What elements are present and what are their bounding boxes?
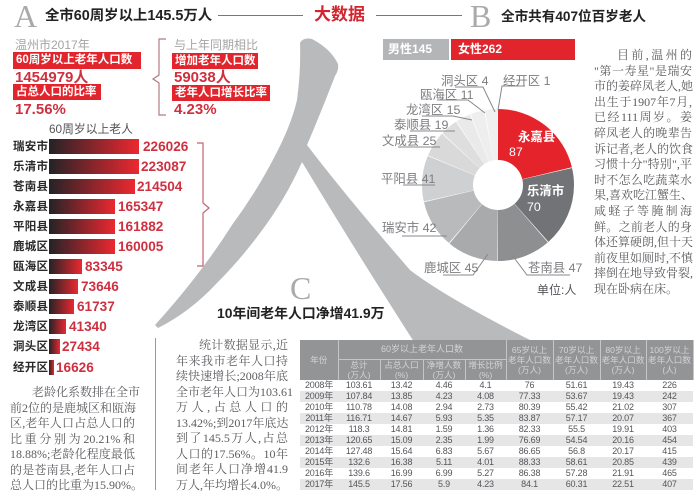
text block: oldest resident story: 摔倒在地导致骨裂, (594, 266, 693, 280)
text block: ageing coefficient: 比重分别为20.21%和 (10, 432, 135, 446)
data table: elderly population 2008-2017: (%) (395, 370, 408, 380)
data table: elderly population 2008-2017: (万人) (565, 365, 588, 375)
text block: ten-year growth: 间老年人口净增41.9 (176, 462, 288, 476)
data table: elderly population 2008-2017: 13.42 (391, 380, 412, 390)
donut chart: centenarians by district: 洞头区 4 (441, 74, 489, 88)
female segment (451, 39, 575, 60)
text block: ten-year growth (176, 338, 293, 492)
data table: elderly population 2008-2017: 1.59 (436, 424, 452, 434)
data table: elderly population 2008-2017: 80.39 (519, 402, 540, 412)
bar: 文成县: 73646 (81, 279, 119, 294)
data table: elderly population 2008-2017: (人) (662, 365, 677, 375)
data table: elderly population 2008-2017: 6.83 (436, 446, 452, 456)
data table: elderly population 2008-2017: 83.87 (519, 413, 540, 423)
bar: 龙湾区 (13, 319, 107, 334)
panel: gender split bar (383, 39, 575, 60)
value: population aged 60+: 1454979人 (15, 69, 88, 86)
bracket grouping top six districts (197, 142, 210, 267)
bar: 永嘉县 (13, 199, 163, 214)
donut chart: centenarians by district: 单位:人 (537, 282, 576, 297)
value: growth rate: 4.23% (174, 101, 217, 118)
data table: elderly population 2008-2017: 2008年 (305, 380, 333, 390)
text block: oldest resident story: 时不怎么吃蔬菜水 (594, 173, 692, 187)
data table: elderly population 2008-2017: 20.17 (612, 446, 634, 456)
data table: elderly population 2008-2017: (万人) (433, 370, 455, 380)
data table: elderly population 2008-2017: 1.99 (477, 435, 494, 445)
donut chart: centenarians by district: 70 (527, 200, 541, 214)
data table: elderly population 2008-2017: 5.9 (438, 479, 450, 489)
bar: 瑞安市: 226026 (143, 139, 188, 154)
data table: elderly population 2008-2017: 净增人数 (427, 360, 461, 370)
label: share of population: 占总人口的比率 (16, 86, 96, 98)
bar: 鹿城区: 160005 (118, 239, 163, 254)
data table: elderly population 2008-2017: 55.42 (566, 402, 587, 412)
data table: elderly population 2008-2017: (万人) (612, 365, 634, 375)
data table: elderly population 2008-2017: 老年人口数 (602, 355, 644, 365)
data table: elderly population 2008-2017: 2.94 (436, 402, 452, 412)
female segment: 女性262 (458, 42, 502, 56)
donut chart: centenarians by district: 87 (509, 145, 523, 159)
data table: elderly population 2008-2017: 4.23 (477, 479, 494, 489)
data table: elderly population 2008-2017: 14.81 (391, 424, 412, 434)
data table: elderly population 2008-2017: 5.11 (436, 457, 452, 467)
bar: 瓯海区 (13, 259, 123, 274)
data table: elderly population 2008-2017: 17.56 (391, 479, 412, 489)
data table: elderly population 2008-2017: 增长比例 (468, 360, 503, 370)
donut chart: centenarians by district: 永嘉县 (518, 129, 555, 144)
text block: oldest resident story: 习惯十分"特别",平 (594, 157, 692, 171)
data table: elderly population 2008-2017: 22.51 (612, 479, 634, 489)
section C heading: 10年间老年人口净增41.9万 (217, 305, 385, 321)
donut chart: centenarians by district: 经开区 1 (503, 74, 551, 88)
data table: elderly population 2008-2017: 139.6 (348, 468, 370, 478)
data table: elderly population 2008-2017: 82.33 (519, 424, 540, 434)
text block: oldest resident story: 体还算硬朗,但十天 (594, 235, 693, 249)
bar: 永嘉县: 165347 (118, 199, 163, 214)
text block: oldest resident story: 鲜。之前老人的身 (594, 220, 692, 234)
data table: elderly population 2008-2017: 118.3 (349, 424, 369, 434)
data table: elderly population 2008-2017: 2010年 (305, 402, 333, 412)
data table: elderly population 2008-2017: 439 (662, 457, 677, 467)
text block: ten-year growth: 13.42%;到2017年底达 (176, 416, 288, 430)
data table: elderly population 2008-2017: 226 (662, 380, 677, 390)
data table: elderly population 2008-2017: 5.35 (477, 413, 494, 423)
bar: 瓯海区: 83345 (85, 259, 123, 274)
bar: 乐清市 (13, 159, 186, 174)
text block: ten-year growth: 万人,年均增长4.0%。 (176, 478, 288, 492)
bar: 苍南县 (13, 179, 182, 194)
bar: 洞头区 (13, 339, 100, 354)
data table: elderly population 2008-2017: 21.02 (612, 402, 634, 412)
data table: elderly population 2008-2017: 76 (525, 380, 534, 390)
data table: elderly population 2008-2017 (300, 340, 694, 490)
bar: 泰顺县 (13, 299, 115, 314)
text block: oldest resident story (594, 48, 693, 296)
bar: 瑞安市: 瑞安市 (13, 141, 48, 153)
data table: elderly population 2008-2017: 132.6 (348, 457, 370, 467)
bar: 洞头区: 洞头区 (13, 341, 48, 353)
label: added elderly: 增加老年人口数 (175, 55, 256, 67)
bar: 文成县 (13, 279, 119, 294)
data table: elderly population 2008-2017: 454 (662, 435, 677, 445)
data table: elderly population 2008-2017: 2.73 (477, 402, 494, 412)
data table: elderly population 2008-2017: 14.08 (391, 402, 412, 412)
data table: elderly population 2008-2017: 总计 (350, 360, 368, 370)
data table: elderly population 2008-2017: 2016年 (305, 468, 333, 478)
panel: Wenzhou 2017 elderly stats (13, 38, 141, 118)
bar: 龙湾区: 41340 (69, 319, 107, 334)
data table: elderly population 2008-2017: 21.91 (612, 468, 634, 478)
text block: oldest resident story: 前夜里如厕时,不慎 (594, 251, 693, 265)
text block: ten-year growth: 年来我市老年人口持 (176, 354, 288, 368)
data table: elderly population 2008-2017: 86.38 (519, 468, 540, 478)
bar: 平阳县: 161882 (118, 219, 163, 234)
text block: ageing coefficient: 区,老年人口占总人口的 (10, 416, 135, 430)
data table: elderly population 2008-2017: 60.31 (566, 479, 587, 489)
text block: ageing coefficient (10, 385, 143, 492)
bar: 乐清市: 223087 (141, 159, 186, 174)
data table: elderly population 2008-2017: 13.85 (391, 391, 412, 401)
bar: 苍南县: 214504 (137, 179, 182, 194)
data table: elderly population 2008-2017: 20.07 (612, 413, 634, 423)
data table: elderly population 2008-2017: (万人) (518, 365, 541, 375)
data table: elderly population 2008-2017: 15.09 (391, 435, 412, 445)
data table: elderly population 2008-2017: 年份 (310, 355, 327, 365)
data table: elderly population 2008-2017: 19.43 (612, 380, 634, 390)
male segment (383, 39, 449, 60)
data table: elderly population 2008-2017: 57.28 (566, 468, 587, 478)
label: share of population (13, 84, 101, 100)
data table: elderly population 2008-2017: 367 (662, 413, 677, 423)
bar: 洞头区: 27434 (62, 339, 100, 354)
data table: elderly population 2008-2017: 86.65 (519, 446, 540, 456)
bar: 永嘉县: 永嘉县 (13, 201, 48, 213)
bar: 经开区: 16626 (56, 360, 94, 375)
data table: elderly population 2008-2017: 6.99 (436, 468, 452, 478)
donut chart: centenarians by district: 泰顺县 19 (394, 118, 449, 132)
data table: elderly population 2008-2017: 127.48 (346, 446, 372, 456)
data table: elderly population 2008-2017: 2009年 (305, 391, 333, 401)
bar: 平阳县: 平阳县 (13, 221, 48, 233)
value: share of population: 17.56% (15, 101, 66, 118)
data table: elderly population 2008-2017: 4.46 (436, 380, 452, 390)
text block: ageing coefficient: 老龄化系数排在全市 (32, 385, 140, 399)
donut chart: centenarians by district: 龙湾区 15 (406, 102, 461, 117)
bar: 泰顺县: 泰顺县 (13, 301, 48, 313)
text block: oldest resident story: 已经111周岁。姜 (594, 110, 692, 124)
bar: 龙湾区: 龙湾区 (13, 321, 48, 333)
data table: elderly population 2008-2017: 5.27 (477, 468, 494, 478)
data table: elderly population 2008-2017: 16.99 (391, 468, 412, 478)
bar: 泰顺县: 61737 (77, 299, 115, 314)
value: added elderly: 59038人 (174, 69, 231, 86)
text block: ageing coefficient: 18.88%;老龄化程度最低 (10, 447, 135, 461)
bar: 瑞安市 (13, 139, 188, 154)
data table: elderly population 2008-2017: 70岁以上 (559, 345, 594, 355)
section C letter: C (290, 270, 311, 306)
label: growth rate: 老年人口增长比率 (175, 87, 267, 99)
data table: elderly population 2008-2017: 2011年 (305, 413, 333, 423)
data table: elderly population 2008-2017: 77.33 (519, 391, 540, 401)
section A heading: 全市60周岁以上145.5万人 (45, 8, 212, 24)
rule right of title (376, 15, 462, 16)
bar: 苍南县: 苍南县 (13, 181, 48, 193)
data table: elderly population 2008-2017: 19.91 (612, 424, 634, 434)
data table: elderly population 2008-2017: (%) (479, 370, 492, 380)
bar: 瓯海区: 瓯海区 (13, 261, 48, 273)
rule left of title (218, 15, 303, 16)
donut chart: centenarians by district: 瓯海区 11 (420, 87, 474, 102)
data table: elderly population 2008-2017: 51.61 (566, 380, 587, 390)
data table: elderly population 2008-2017: 57.17 (566, 413, 587, 423)
title: 大数据 (314, 5, 365, 24)
text block: oldest resident story: 目前,温州的 (617, 48, 692, 62)
data table: elderly population 2008-2017: 16.38 (391, 457, 412, 467)
data table: elderly population 2008-2017: 4.23 (436, 391, 452, 401)
text block: ten-year growth: 全市老年人口为103.61 (176, 384, 293, 398)
label: population aged 60+: 60周岁以上老年人口数 (16, 54, 132, 66)
donut chart: centenarians by district (381, 74, 583, 297)
bar: 鹿城区: 鹿城区 (13, 241, 48, 253)
bar chart: population aged 60+ by district (13, 122, 188, 375)
data table: elderly population 2008-2017: 465 (662, 468, 677, 478)
data table: elderly population 2008-2017: 84.1 (521, 479, 538, 489)
data table: elderly population 2008-2017: 19.43 (612, 391, 634, 401)
data table: elderly population 2008-2017: 老年人口数 (648, 355, 691, 365)
text block: ten-year growth: 人口的17.56%。10年 (176, 446, 288, 460)
panel: year-on-year comparison (172, 38, 270, 118)
text block: ageing coefficient: 前2位的是鹿城区和瓯海 (10, 400, 136, 414)
data table: elderly population 2008-2017: 2013年 (305, 435, 333, 445)
data table: elderly population 2008-2017: 65岁以上 (512, 345, 547, 355)
section B heading: 全市共有407位百岁老人 (501, 9, 646, 24)
text block: oldest resident story: 果,喜欢吃江蟹生、 (594, 188, 693, 202)
data table: elderly population 2008-2017: (万人) (348, 370, 370, 380)
label: population aged 60+ (13, 52, 141, 69)
text block: oldest resident story: 咸蛏子等腌制海 (594, 204, 692, 218)
text block: oldest resident story: 现在卧病在床。 (594, 282, 678, 296)
data table: elderly population 2008-2017: 88.33 (519, 457, 540, 467)
data table: elderly population 2008-2017: 116.71 (346, 413, 372, 423)
donut chart: centenarians by district: 文成县 25 (382, 133, 437, 148)
data table: elderly population 2008-2017: 5.93 (436, 413, 452, 423)
donut chart: centenarians by district: 鹿城区 45 (424, 260, 479, 275)
data table: elderly population 2008-2017: 415 (662, 446, 677, 456)
data table: elderly population 2008-2017: 老年人口数 (508, 355, 551, 365)
data table: elderly population 2008-2017: 242 (662, 391, 677, 401)
bar: 平阳县 (13, 219, 163, 234)
data table: elderly population 2008-2017: 103.61 (346, 380, 372, 390)
text block: ten-year growth: 到了145.5万人,占总 (176, 431, 288, 445)
data table: elderly population 2008-2017: 4.1 (480, 380, 491, 390)
data table: elderly population 2008-2017: 2012年 (305, 424, 333, 434)
comparison caption: 与上年同期相比 (174, 38, 258, 52)
data table: elderly population 2008-2017: 15.64 (391, 446, 412, 456)
bar: 文成县: 文成县 (13, 281, 48, 293)
data table: elderly population 2008-2017: 占总人口 (384, 360, 419, 370)
bar: 经开区: 经开区 (13, 362, 48, 374)
donut chart: centenarians by district: 苍南县 47 (528, 260, 583, 275)
stats caption: 温州市2017年 (15, 38, 90, 52)
data table: elderly population 2008-2017: 4.08 (477, 391, 494, 401)
data table: elderly population 2008-2017: 407 (662, 479, 677, 489)
data table: elderly population 2008-2017: 100岁以上 (649, 345, 690, 355)
text block: oldest resident story: 市的姜碎凤老人,她 (594, 79, 693, 93)
donut chart: centenarians by district: 乐清市 (527, 183, 564, 198)
data table: elderly population 2008-2017: 14.67 (391, 413, 412, 423)
data table: elderly population 2008-2017: 60岁以上老年人口数 (381, 344, 463, 354)
text block: oldest resident story: 诉记者,老人的饮食 (594, 142, 693, 156)
data table: elderly population 2008-2017: 58.61 (566, 457, 587, 467)
text block: oldest resident story: 出生于1907年7月, (594, 95, 692, 109)
data table: elderly population 2008-2017: 53.67 (566, 391, 587, 401)
data table: elderly population 2008-2017: 20.16 (612, 435, 634, 445)
text block: ten-year growth: 续快速增长;2008年底 (176, 369, 288, 383)
data table: elderly population 2008-2017: 307 (662, 402, 677, 412)
chart title: 60周岁以上老人 (49, 122, 133, 136)
text block: oldest resident story: "第一寿星"是瑞安 (594, 64, 692, 78)
data table: elderly population 2008-2017: 4.01 (477, 457, 494, 467)
vertical divider (155, 338, 156, 490)
text block: oldest resident story: 碎凤老人的晚辈告 (594, 126, 692, 140)
bracket between stats panels (152, 38, 166, 116)
donut chart: centenarians by district: 平阳县 41 (381, 172, 436, 186)
data table: elderly population 2008-2017: 76.69 (519, 435, 540, 445)
text block: ten-year growth: 统计数据显示,近 (199, 338, 288, 352)
text block: ageing coefficient: 的是苍南县,老年人口占 (10, 462, 135, 476)
data table: elderly population 2008-2017: 55.5 (568, 424, 585, 434)
text block: ten-year growth: 万人,占总人口的 (176, 400, 288, 414)
data table: elderly population 2008-2017: 56.8 (568, 446, 585, 456)
data table: elderly population 2008-2017: 2.35 (436, 435, 452, 445)
data table: elderly population 2008-2017: 老年人口数 (555, 355, 598, 365)
data table: elderly population 2008-2017: 403 (662, 424, 677, 434)
donut chart: centenarians by district: 瑞安市 42 (382, 220, 437, 235)
text block: ageing coefficient: 总人口的比重为15.90%。 (10, 478, 143, 492)
data table: elderly population 2008-2017: 145.5 (348, 479, 370, 489)
data table: elderly population 2008-2017: 2014年 (305, 446, 333, 456)
bar: 乐清市: 乐清市 (13, 161, 48, 173)
data table: elderly population 2008-2017: 110.78 (346, 402, 372, 412)
data table: elderly population 2008-2017: 5.67 (477, 446, 494, 456)
bar: 经开区 (13, 360, 94, 375)
male segment: 男性145 (388, 42, 432, 56)
data table: elderly population 2008-2017: 120.65 (346, 435, 372, 445)
data table: elderly population 2008-2017: 2015年 (305, 457, 333, 467)
bar: 鹿城区 (13, 239, 163, 254)
data table: elderly population 2008-2017: 107.84 (346, 391, 372, 401)
data table: elderly population 2008-2017: 80岁以上 (605, 345, 641, 355)
data table: elderly population 2008-2017: 1.36 (477, 424, 494, 434)
data table: elderly population 2008-2017: 2017年 (305, 479, 333, 489)
data table: elderly population 2008-2017: 20.85 (612, 457, 634, 467)
data table: elderly population 2008-2017: 54.54 (566, 435, 587, 445)
